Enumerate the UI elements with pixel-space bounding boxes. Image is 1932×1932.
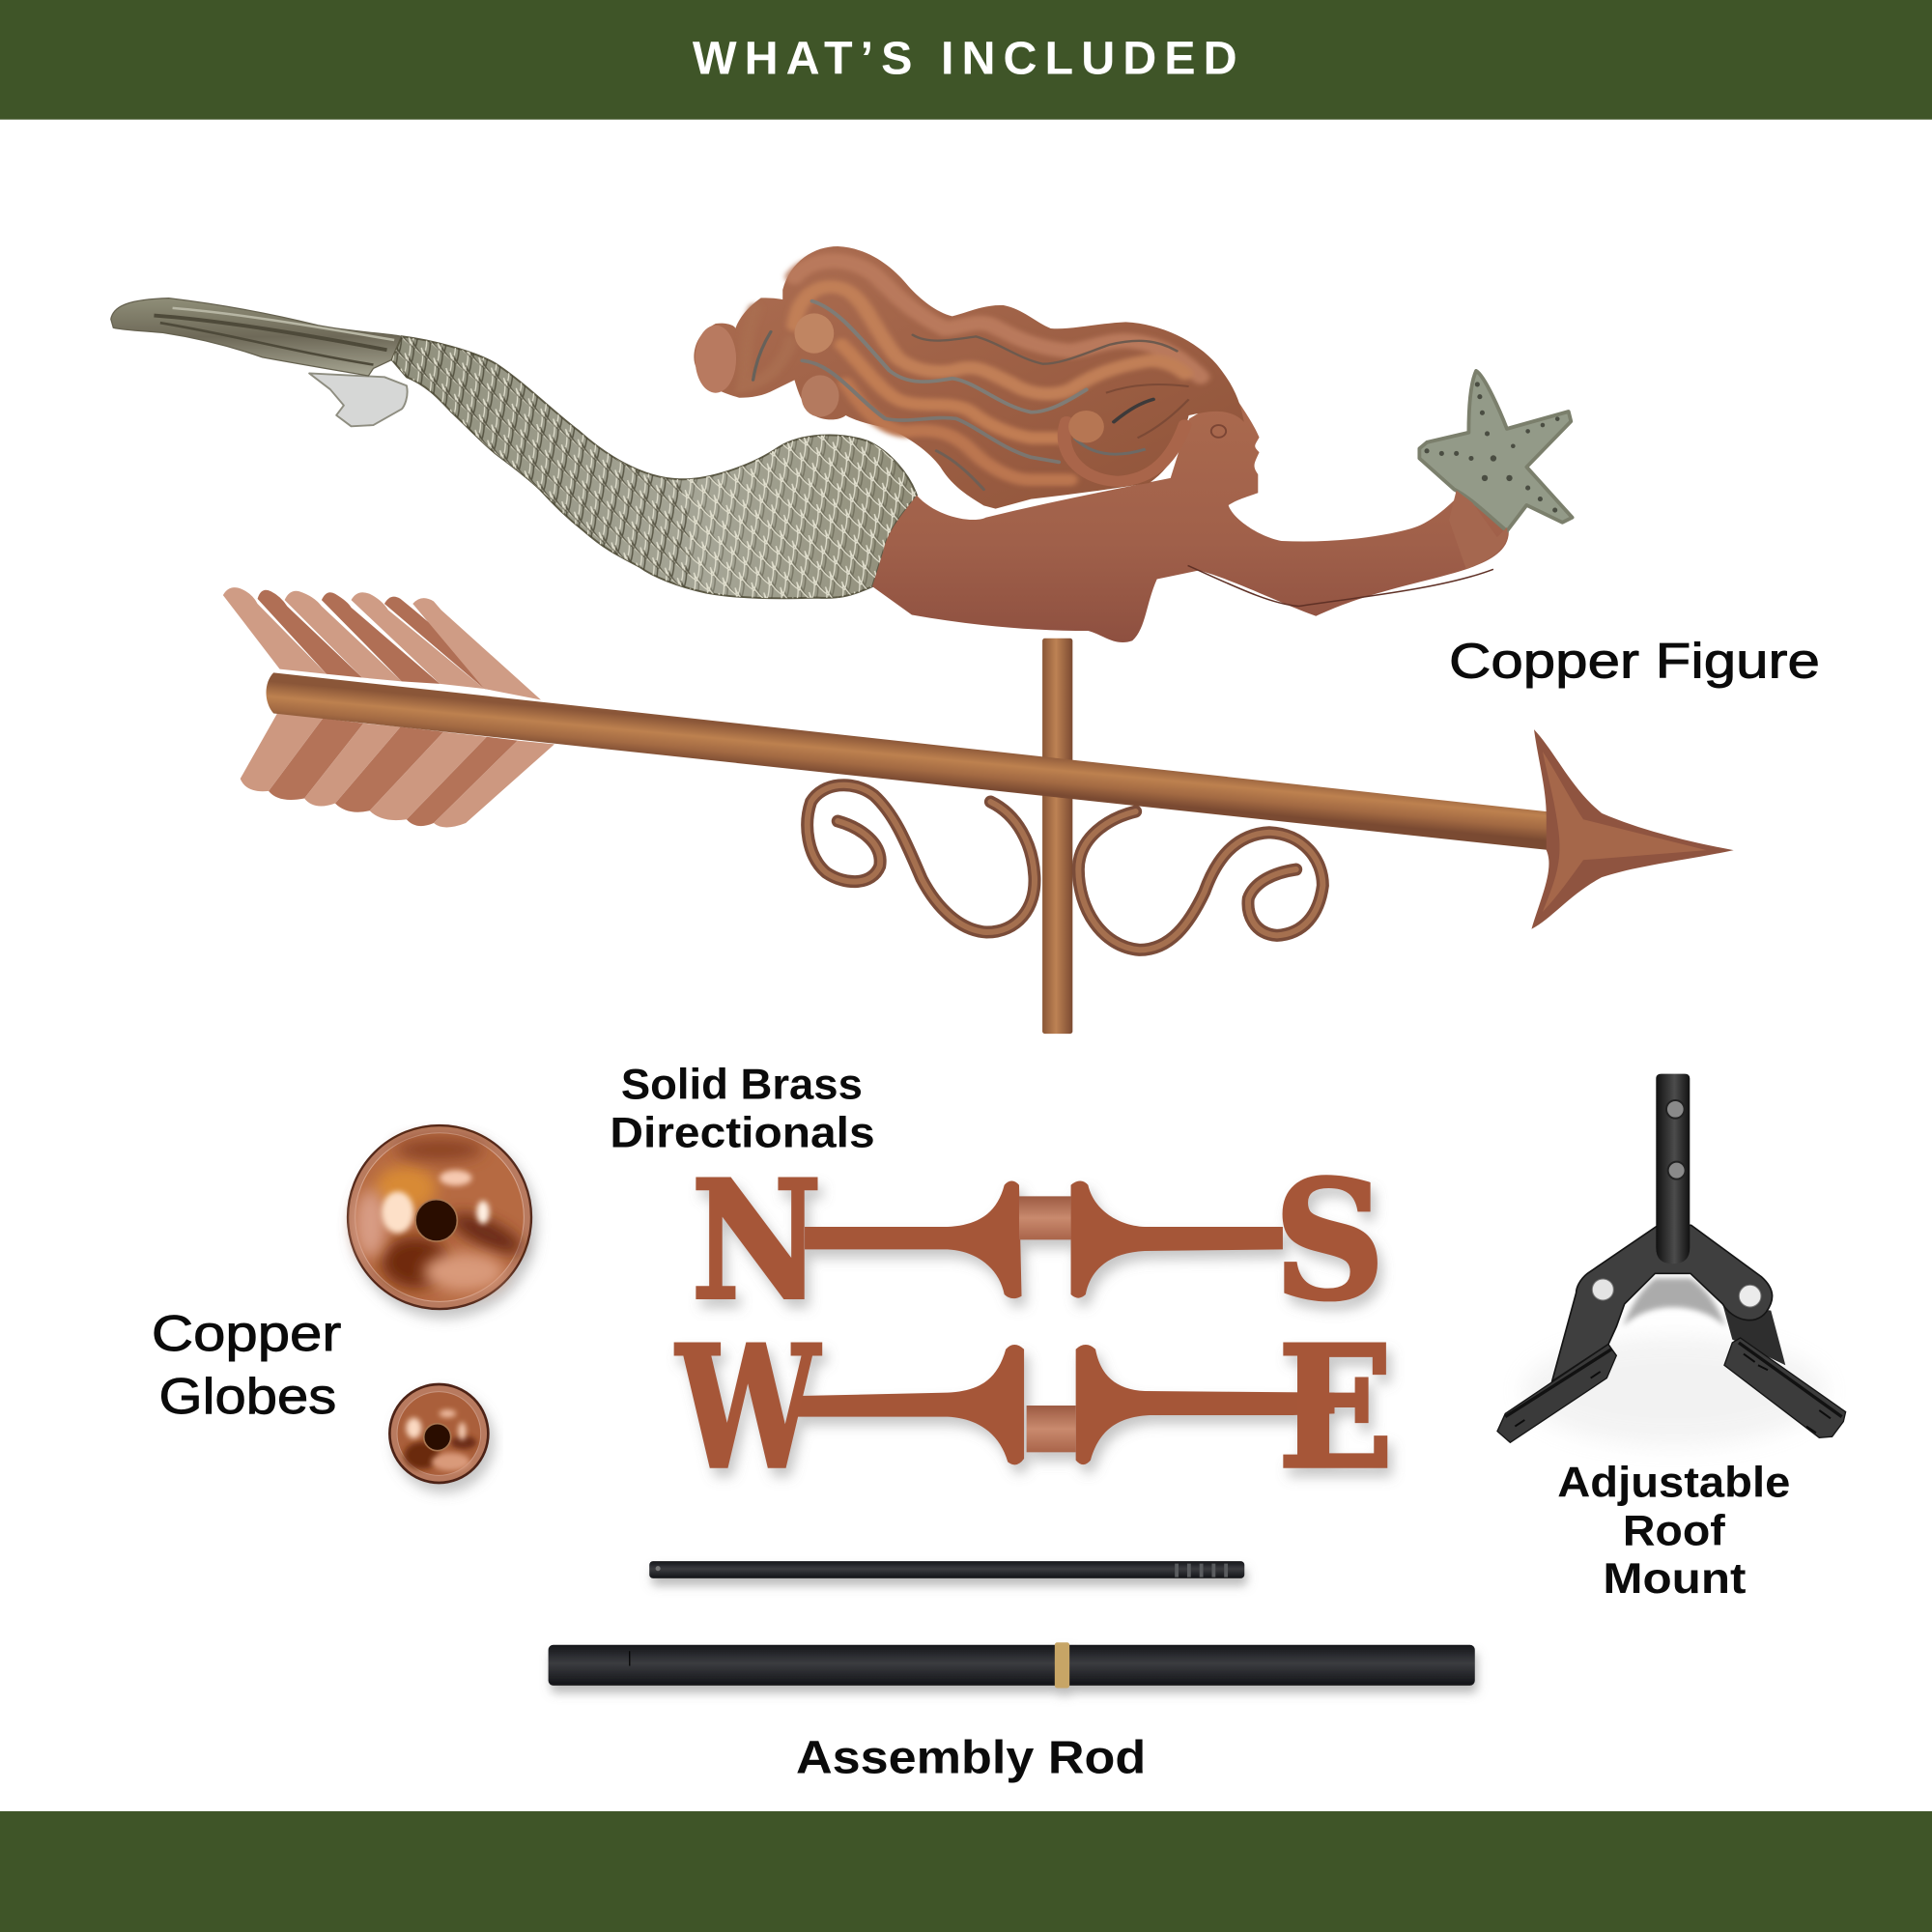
scrollwork [808,785,1322,950]
label: solid brass directionals [610,1062,875,1157]
title: WHAT’S INCLUDED [693,33,1237,85]
label: adjustable roof mount: Mount [1603,1555,1747,1603]
label: copper globes: Copper [152,1306,341,1362]
right foot [1724,1338,1846,1437]
label: adjustable roof mount: Roof [1623,1507,1725,1554]
starfish [1419,371,1573,569]
thick assembly rod [549,1642,1475,1688]
arrow shaft [267,672,1550,850]
label: assembly rod: Assembly Rod [796,1731,1146,1783]
label: adjustable roof mount: Adjustable [1557,1460,1790,1507]
label: solid brass directionals: Solid Brass [621,1062,863,1109]
large copper globe [348,1125,531,1309]
arrow feathers, upper [223,587,541,699]
rear arm of right side [1722,1304,1785,1365]
footer band [0,1811,1932,1932]
label: copper globes [152,1306,341,1425]
west-east directional: E [1278,1309,1394,1506]
upper tail fin [111,298,408,376]
scaled tail [392,336,917,598]
left foot [1497,1345,1616,1442]
small copper globe [389,1384,488,1483]
north-south directional [692,1145,1385,1336]
label: solid brass directionals: Directionals [610,1109,875,1156]
thin assembly rod [649,1561,1244,1578]
post [1656,1074,1690,1264]
arrow feathers, lower [241,714,554,828]
hair [694,246,1244,509]
arrow head [1531,729,1734,929]
vertical rod [1042,639,1072,1034]
torso, head and arm [872,393,1509,642]
bolts [1592,1100,1761,1307]
north-south directional: S [1274,1145,1385,1336]
adjustable roof mount [1497,1074,1846,1446]
bracket plate [1552,1225,1773,1381]
west-east directional: W [675,1309,821,1506]
lower tail fin [309,373,408,426]
label: adjustable roof mount [1557,1460,1790,1603]
label: copper globes: Globes [159,1369,336,1425]
copper weathervane figure [111,246,1734,1034]
mermaid figure [111,246,1573,642]
header band [0,0,1932,120]
north-south directional: N [692,1145,822,1336]
label: copper figure: Copper Figure [1449,634,1820,689]
west-east directional [675,1309,1394,1506]
